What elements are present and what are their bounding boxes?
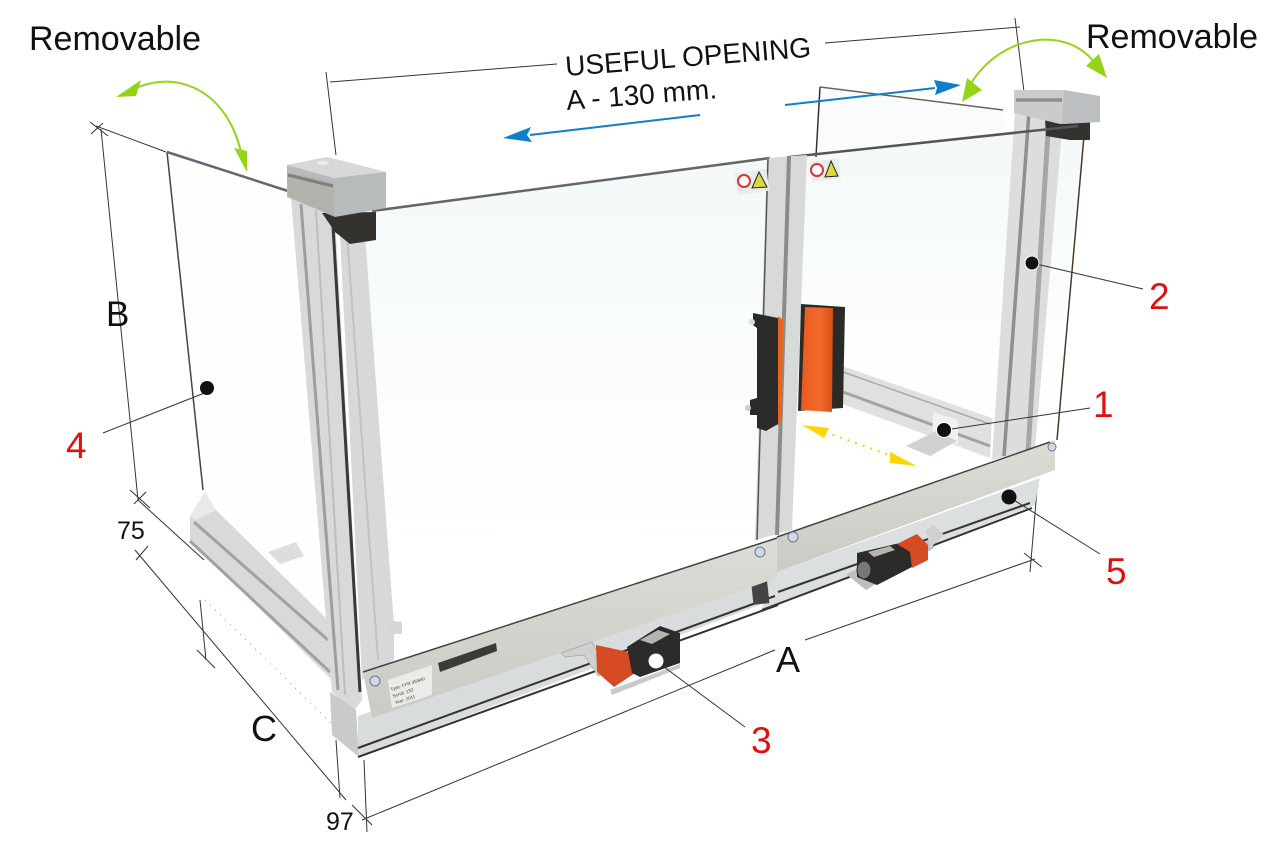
panel: left door glass: [362, 158, 770, 652]
dimension: C: C: [251, 708, 277, 749]
arrow: blue right: [785, 80, 961, 105]
front rail plate right: [777, 440, 1056, 572]
left rear rail: [190, 492, 332, 680]
callout number 5: 5: [1106, 551, 1127, 592]
callout number 3: 3: [751, 720, 772, 761]
arrow: green right swing: [962, 40, 1107, 102]
dimension lines: [90, 18, 1042, 832]
safety switch front: [561, 626, 680, 695]
right post: [992, 90, 1100, 460]
arrow: yellow door travel: [802, 425, 917, 466]
arrow: green left swing: [116, 80, 247, 172]
back rail with bracket: [842, 366, 992, 458]
leader lines: [103, 263, 1143, 727]
label: Removable right: Removable: [1086, 18, 1258, 56]
safety switch rear: [846, 525, 944, 590]
callout dots: [200, 256, 1039, 668]
dimension: B: B: [106, 295, 129, 334]
rating plate text: Year: 2011: [394, 694, 416, 705]
callout number 4: 4: [66, 425, 87, 466]
dimension: A: A: [776, 639, 800, 680]
left door top edge: [372, 158, 770, 211]
dimension: 75: 75: [117, 517, 145, 545]
callout number 1: 1: [1093, 384, 1114, 425]
dimension: 97: 97: [326, 808, 354, 836]
front rail lower track: [358, 478, 1040, 757]
arrow: blue left: [503, 115, 700, 142]
heading: opening formula: A - 130 mm.: [565, 73, 718, 116]
rating plate text: Serial: 133: [392, 687, 414, 699]
label: Removable left: Removable: [29, 20, 201, 58]
panel: rear side glass: [167, 152, 320, 598]
handle: right: [798, 304, 845, 412]
warning stickers: [735, 158, 841, 195]
right door top edge: [790, 126, 1078, 157]
panel: back glass: [806, 87, 1040, 440]
handle: left: [745, 313, 783, 431]
centre stiles: [755, 155, 807, 540]
rating plate text: Type: FFR 35/840: [390, 676, 426, 692]
front rail plate left: [363, 538, 777, 718]
callout number 2: 2: [1149, 276, 1170, 317]
panel: right door glass: [790, 126, 1084, 522]
heading: useful opening: USEFUL OPENING: [564, 32, 812, 82]
left post: [287, 157, 402, 757]
